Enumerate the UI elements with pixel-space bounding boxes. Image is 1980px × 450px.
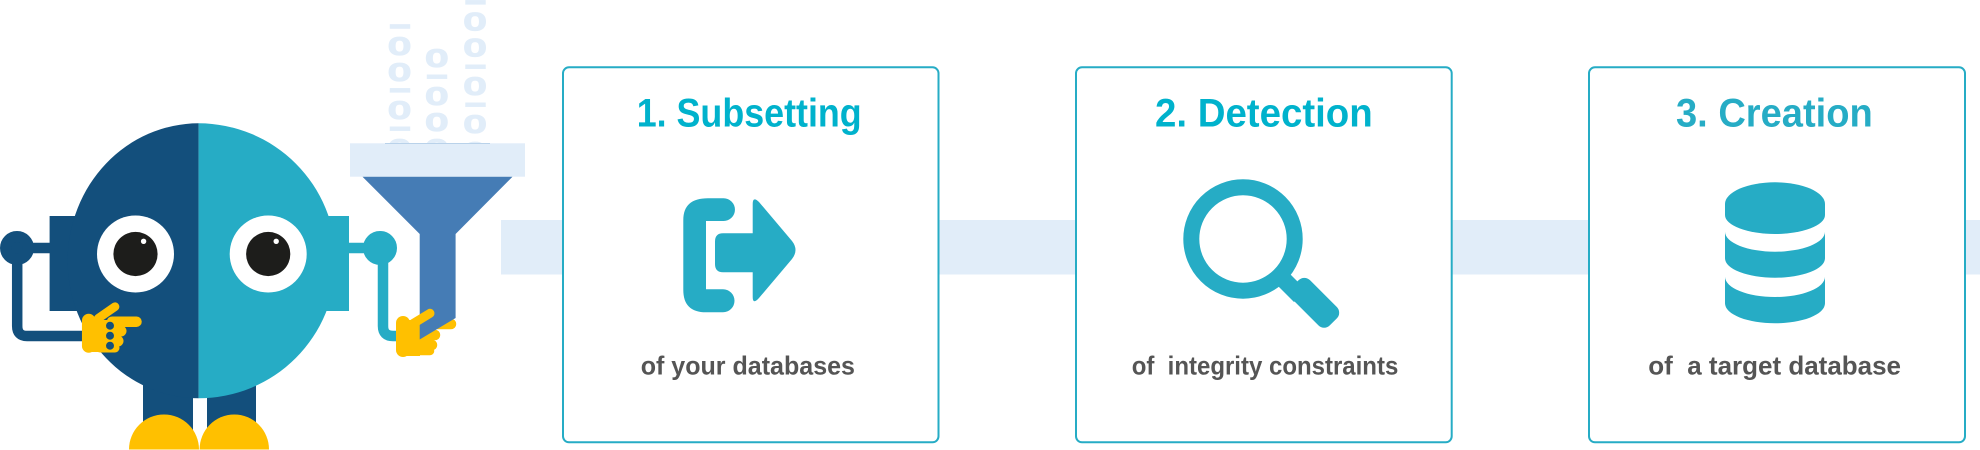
binary data stream: I	[458, 63, 490, 71]
card frame	[1589, 67, 1965, 442]
heading: 3. Creation	[1676, 92, 1873, 136]
left antenna arm	[6, 236, 84, 336]
legs	[143, 380, 256, 430]
caption: of your databases	[641, 350, 855, 380]
binary data stream: 0	[389, 135, 410, 162]
left hand	[89, 307, 136, 352]
panel: detection	[1076, 67, 1452, 442]
binary data stream: 0	[389, 97, 410, 124]
icon: export arrow	[683, 198, 796, 312]
binary data stream: 0	[464, 138, 486, 165]
right antenna arm	[349, 236, 398, 336]
panel: creation	[1589, 67, 1965, 442]
binary data stream: 0	[426, 109, 447, 136]
binary data stream: I	[383, 125, 415, 133]
funnel mouth	[350, 143, 525, 177]
binary data stream: 0	[426, 45, 447, 72]
icon: magnifying glass	[1191, 187, 1342, 331]
right hand fingers	[403, 320, 451, 356]
binary data stream: I	[383, 86, 415, 94]
left eye	[97, 216, 174, 292]
right hand thumb	[413, 313, 430, 324]
binary data stream: 0	[464, 34, 486, 61]
icon: database	[1725, 182, 1825, 323]
mascot robot with funnel	[6, 0, 525, 450]
caption: of integrity constraints	[1132, 350, 1398, 380]
binary data stream: I	[458, 101, 490, 109]
binary data stream: I	[420, 73, 452, 81]
right ear	[289, 216, 349, 311]
binary data stream: 0	[426, 135, 447, 162]
binary data stream: 0	[389, 33, 410, 60]
funnel body	[362, 177, 512, 340]
binary data stream: 0	[464, 8, 486, 35]
binary data stream: 0	[464, 73, 486, 100]
left ear	[50, 216, 110, 311]
right eye	[230, 216, 307, 292]
card frame	[1076, 67, 1452, 442]
binary data stream: 0	[389, 59, 410, 86]
head right half	[199, 123, 336, 398]
heading: 2. Detection	[1155, 92, 1373, 136]
head left half	[68, 123, 199, 398]
funnel rim highlight	[385, 143, 490, 144]
shoes	[129, 414, 269, 450]
panel: subsetting	[563, 67, 938, 442]
horizontal process band	[501, 220, 1980, 274]
card frame	[563, 67, 938, 442]
binary data stream: 0	[464, 111, 486, 138]
caption: of a target database	[1648, 350, 1901, 380]
binary data stream	[383, 0, 490, 165]
binary data stream: 0	[426, 83, 447, 110]
binary data stream: I	[383, 23, 415, 30]
heading: 1. Subsetting	[637, 92, 862, 136]
